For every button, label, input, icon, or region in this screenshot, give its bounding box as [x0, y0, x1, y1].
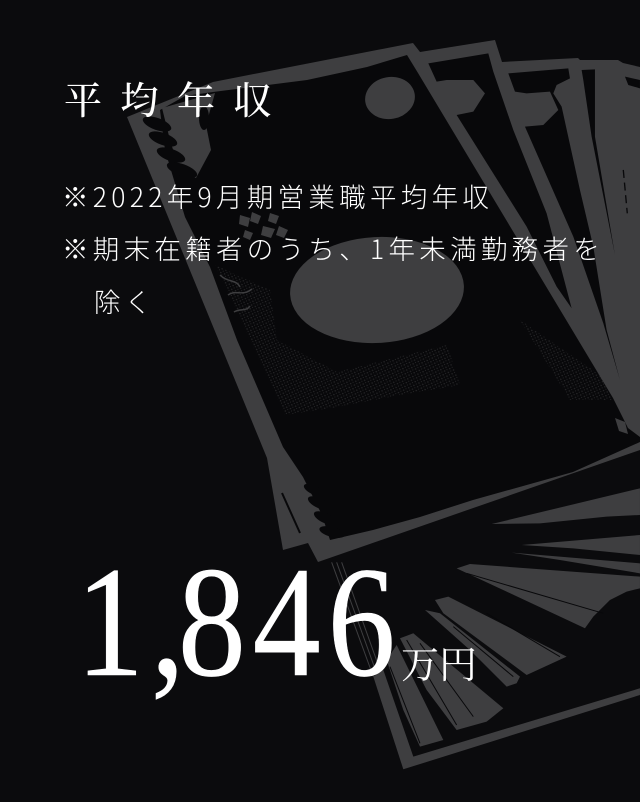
ornament: upper-left flourish [141, 93, 215, 181]
second banknote [428, 53, 640, 380]
fourth banknote [582, 69, 615, 255]
banknote engraving textures [215, 212, 628, 540]
note line 1: ※2022年9月期営業職平均年収 [62, 176, 493, 215]
note line 2: ※期末在籍者のうち、1年未満勤務者を [62, 228, 604, 267]
salary figure: 1,846 [76, 535, 402, 710]
main banknote interior [160, 55, 640, 540]
salary unit: 万円 [401, 634, 477, 689]
banknote silhouette [127, 40, 640, 562]
lower fan of banknote edges [332, 488, 640, 769]
fifth banknote [625, 77, 640, 88]
portrait medallion [287, 233, 467, 347]
third banknote [508, 68, 620, 380]
note line 3: 除く [94, 281, 156, 320]
title: 平均年収 [64, 70, 290, 125]
watermark circle [362, 73, 418, 123]
